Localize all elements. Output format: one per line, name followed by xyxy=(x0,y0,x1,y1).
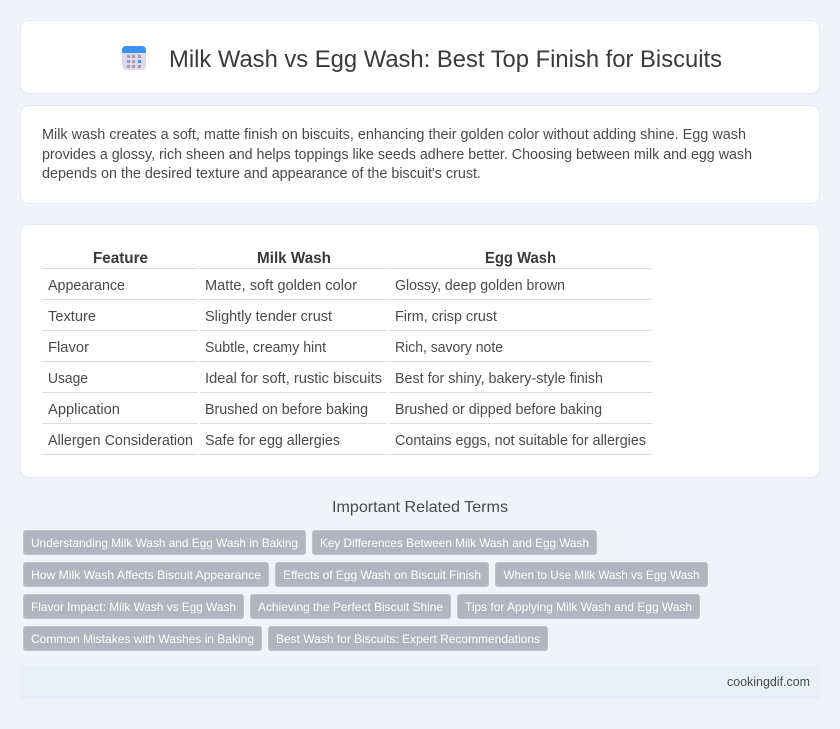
tag row 2 xyxy=(24,562,708,586)
tag row 4 xyxy=(24,626,548,650)
row: flavor: Rich, savory note xyxy=(395,340,503,356)
panel: introduction xyxy=(20,106,820,204)
row: texture: Firm, crisp crust xyxy=(395,309,497,325)
footer source: cookingdif.com xyxy=(727,674,810,689)
tag row 3: Tips for Applying Milk Wash and Egg Wash xyxy=(465,600,692,614)
row: texture xyxy=(48,309,497,325)
heading: related terms: Important Related Terms xyxy=(332,499,508,516)
tag row 1 xyxy=(24,530,596,554)
text block: introduction xyxy=(42,127,752,182)
table header: Egg Wash xyxy=(485,250,556,267)
row: usage: Ideal for soft, rustic biscuits xyxy=(205,371,382,387)
row: flavor xyxy=(48,340,503,356)
tag row 3: Achieving the Perfect Biscuit Shine xyxy=(258,600,443,614)
tag row 3: Flavor Impact: Milk Wash vs Egg Wash xyxy=(31,600,236,614)
row: flavor: Subtle, creamy hint xyxy=(205,340,326,356)
row: flavor: Flavor xyxy=(48,340,89,356)
row: appearance: Matte, soft golden color xyxy=(205,278,357,294)
table header: Feature xyxy=(93,250,148,267)
row: application: Brushed or dipped before baking xyxy=(395,402,602,418)
row: allergen consideration: Allergen Consideration xyxy=(48,433,193,449)
row: usage: Best for shiny, bakery-style finish xyxy=(395,371,603,387)
footer xyxy=(20,665,820,699)
row: usage: Usage xyxy=(48,371,88,387)
row: appearance xyxy=(48,278,565,294)
tag row 1: Key Differences Between Milk Wash and Egg Wash xyxy=(320,536,589,550)
row: texture: Slightly tender crust xyxy=(205,309,332,325)
row: texture: Texture xyxy=(48,309,96,325)
related term tags xyxy=(24,530,708,650)
title: Milk Wash vs Egg Wash: Best Top Finish for Biscuits xyxy=(169,46,722,73)
tag row 4: Best Wash for Biscuits: Expert Recommendations xyxy=(276,632,540,646)
icon: calendar xyxy=(122,46,146,70)
tag row 2: When to Use Milk Wash vs Egg Wash xyxy=(504,568,700,582)
panel: header xyxy=(20,20,820,94)
text block: introduction: provides a glossy, rich sheen and helps toppings like seeds adhere better. Choosing between milk and egg wash xyxy=(42,147,752,163)
row: application: Brushed on before baking xyxy=(205,402,368,418)
row: allergen consideration: Contains eggs, not suitable for allergies xyxy=(395,433,646,449)
table header: Milk Wash xyxy=(257,250,331,267)
tag row 1: Understanding Milk Wash and Egg Wash in Baking xyxy=(31,536,298,550)
row: allergen consideration xyxy=(48,433,646,449)
row: appearance: Appearance xyxy=(48,278,125,294)
table header xyxy=(93,250,556,267)
tag row 3 xyxy=(24,594,700,618)
tag row 4: Common Mistakes with Washes in Baking xyxy=(31,632,254,646)
row: application: Application xyxy=(48,402,120,418)
text block: introduction: Milk wash creates a soft, matte finish on biscuits, enhancing their golden color without adding shine. Egg wash xyxy=(42,127,746,143)
text block: introduction: depends on the desired texture and appearance of the biscuit's crust. xyxy=(42,166,481,182)
row: allergen consideration: Safe for egg allergies xyxy=(205,433,340,449)
row: usage xyxy=(48,371,603,387)
row: application xyxy=(48,402,602,418)
panel: comparison table xyxy=(20,224,820,478)
tag row 2: How Milk Wash Affects Biscuit Appearance xyxy=(31,568,261,582)
row: appearance: Glossy, deep golden brown xyxy=(395,278,565,294)
tag row 2: Effects of Egg Wash on Biscuit Finish xyxy=(283,568,481,582)
